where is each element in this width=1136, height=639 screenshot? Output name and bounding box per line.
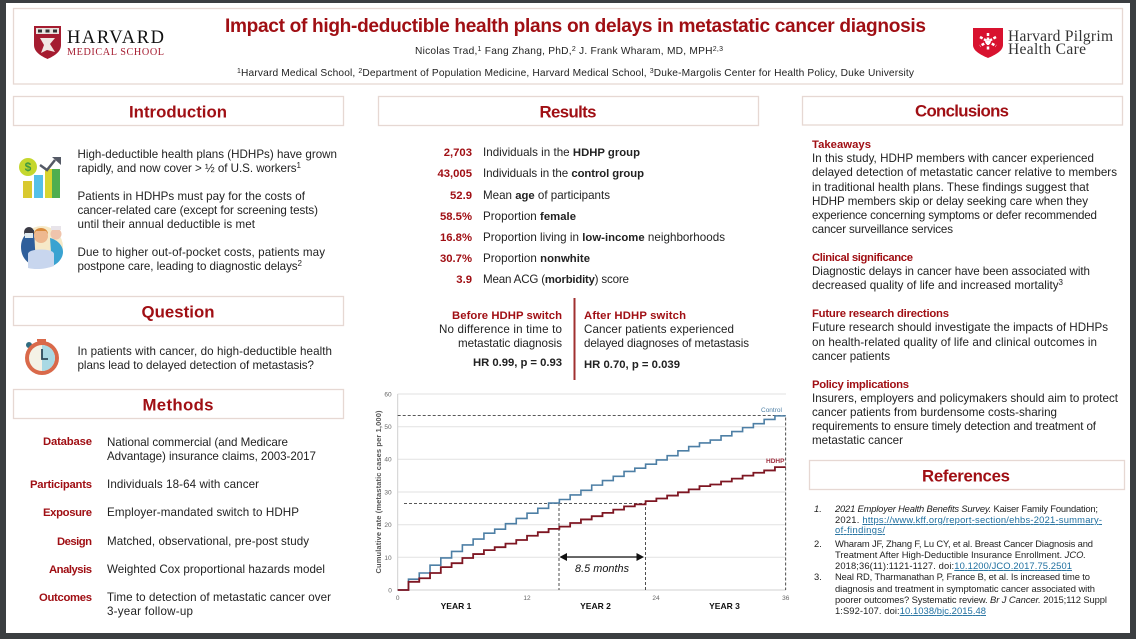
block: future research directions: on health-related quality of life and clinical outcomes in bbox=[812, 336, 1097, 349]
block: clinical significance: Diagnostic delays in cancer have been associated with bbox=[812, 265, 1090, 278]
block: takeaways: delayed detection of metastatic cancer relative to members bbox=[812, 166, 1117, 179]
block: future research directions: cancer patients bbox=[812, 350, 890, 363]
icon: health care workers bbox=[21, 226, 63, 269]
logo: Harvard Medical School: MEDICAL SCHOOL bbox=[67, 47, 164, 58]
reference 3 bbox=[814, 571, 1107, 616]
text: intro paragraph 2: Patients in HDHPs must pay for the costs of bbox=[78, 190, 306, 203]
stat: control group: Individuals in the control group bbox=[483, 167, 644, 180]
row: participants: Individuals 18-64 with cancer bbox=[107, 478, 259, 491]
reference 2: 2018;36(11):1121-1127. doi:10.1200/JCO.2017.75.2501 bbox=[835, 560, 1072, 571]
panel: results bbox=[374, 96, 790, 611]
x axis labels: 36 bbox=[782, 595, 790, 602]
reference 3: 1:S92-107. doi:10.1038/bjc.2015.48 bbox=[835, 605, 986, 616]
label: 8.5 months: 8.5 months bbox=[575, 563, 630, 575]
heading: results: Results bbox=[540, 102, 596, 122]
panel: question bbox=[14, 296, 344, 375]
chart: cumulative rate of metastatic cases bbox=[374, 392, 790, 611]
row: database bbox=[43, 436, 316, 463]
stat: age: Mean age of participants bbox=[483, 189, 610, 202]
authors: 2,3 bbox=[713, 46, 723, 53]
text: intro paragraph 2: cancer-related care (except for screening tests) bbox=[78, 204, 318, 217]
text: intro paragraph 1: High-deductible health plans (HDHPs) have grown bbox=[78, 148, 337, 161]
block: takeaways bbox=[812, 139, 1117, 236]
text: intro paragraph 3: Due to higher out-of-pocket costs, patients may bbox=[78, 246, 325, 259]
logo: Harvard Pilgrim Health Care: Harvard Pilgrim bbox=[1008, 28, 1113, 45]
row: exposure: Employer-mandated switch to HDHP bbox=[107, 506, 299, 519]
row: database: Database bbox=[43, 436, 92, 448]
affiliations: 2 bbox=[358, 68, 362, 75]
heading: introduction: Introduction bbox=[129, 102, 227, 122]
authors: 2 bbox=[572, 46, 576, 53]
affiliations: Department of Population Medicine, Harvard Medical School, bbox=[362, 68, 650, 79]
authors: 1 bbox=[478, 46, 482, 53]
stat: morbidity: 3.9 bbox=[456, 274, 472, 286]
row: analysis: Weighted Cox proportional hazards model bbox=[107, 563, 325, 576]
reference 2: Wharam JF, Zhang F, Lu CY, et al. Breast Cancer Diagnosis and bbox=[835, 538, 1093, 549]
y axis labels: 40 bbox=[384, 456, 392, 464]
reference 3: diagnosis and treatment in symptomatic cancer associated with bbox=[835, 583, 1095, 594]
row: database: National commercial (and Medicare bbox=[107, 436, 288, 449]
panel: references bbox=[810, 460, 1124, 616]
logo: Harvard Pilgrim Health Care: Health Care bbox=[1008, 41, 1086, 58]
row: exposure: Exposure bbox=[43, 507, 92, 519]
text: intro paragraph 3: postpone care, leading to diagnostic delays bbox=[78, 260, 298, 273]
row: database: Advantage) insurance claims, 2003-2017 bbox=[107, 450, 316, 463]
block: takeaways: experience concerning symptoms or defer recommended bbox=[812, 209, 1097, 222]
reference 2: 2. bbox=[814, 538, 822, 549]
reference 3: 3. bbox=[814, 571, 822, 582]
callout: before HDHP switch bbox=[439, 310, 562, 369]
line: HDHP bbox=[398, 467, 786, 590]
heading: conclusions: Conclusions bbox=[915, 102, 1009, 120]
row: participants bbox=[30, 478, 259, 491]
text: intro paragraph 3: 2 bbox=[298, 259, 303, 268]
block: policy implications: cancer patients from burdensome costs-sharing bbox=[812, 406, 1057, 419]
block: takeaways: HDHP members skip or delay seeking care when they bbox=[812, 195, 1088, 208]
stat: female bbox=[440, 210, 576, 223]
stat: morbidity: Mean ACG (morbidity) score bbox=[483, 273, 629, 286]
reference dashed lines bbox=[398, 416, 786, 590]
callout: after HDHP switch bbox=[584, 310, 749, 371]
stat: low income: 16.8% bbox=[440, 232, 472, 244]
x axis labels bbox=[396, 595, 790, 611]
reference 1: 1. bbox=[814, 503, 822, 514]
affiliations: Harvard Medical School, bbox=[241, 68, 358, 79]
stat: HDHP group: 2,703 bbox=[444, 147, 472, 159]
y axis labels bbox=[384, 392, 392, 594]
stat: female: 58.5% bbox=[440, 211, 472, 223]
block: policy implications: metastatic cancer bbox=[812, 434, 903, 447]
label: control: Control bbox=[761, 407, 783, 414]
block: future research directions bbox=[812, 308, 1108, 363]
block: clinical significance bbox=[812, 252, 1090, 292]
reference 2 bbox=[814, 538, 1093, 571]
row: design: Matched, observational, pre-post study bbox=[107, 535, 309, 548]
icon: money and growth chart bbox=[19, 157, 61, 198]
callout: after HDHP switch: Cancer patients experienced bbox=[584, 323, 734, 336]
heading: question: Question bbox=[142, 302, 214, 322]
stat: control group: 43,005 bbox=[437, 168, 472, 180]
logo: Harvard Medical School bbox=[34, 26, 164, 59]
icon: money and growth chart: $ bbox=[25, 160, 32, 174]
block: clinical significance: Clinical significance bbox=[812, 252, 913, 264]
x axis labels: YEAR 3 bbox=[709, 601, 740, 611]
text: intro paragraph 2 bbox=[78, 190, 318, 231]
row: participants: Participants bbox=[30, 479, 92, 491]
affiliations: 1 bbox=[237, 68, 241, 75]
title: Impact of high-deductible health plans on delays in metastatic cancer diagnosis bbox=[225, 16, 926, 37]
heading: conclusions bbox=[802, 96, 1122, 125]
callout: after HDHP switch: After HDHP switch bbox=[584, 310, 686, 322]
authors: Nicolas Trad, bbox=[415, 46, 477, 57]
heading: results bbox=[378, 96, 758, 126]
block: takeaways: cancer surveillance services bbox=[812, 223, 953, 236]
block: future research directions: Future research should investigate the impacts of HDHPs bbox=[812, 321, 1108, 334]
block: takeaways: Takeaways bbox=[812, 139, 871, 151]
text: intro paragraph 1: rapidly, and now cover > ½ of U.S. workers bbox=[78, 162, 297, 175]
stat: low income: Proportion living in low-income neighborhoods bbox=[483, 231, 725, 244]
stat: nonwhite: 30.7% bbox=[440, 253, 472, 265]
label: HDHP: HDHP bbox=[766, 458, 785, 465]
affiliations: Duke-Margolis Center for Health Policy, Duke University bbox=[654, 68, 915, 79]
text: research question: plans lead to delayed detection of metastasis? bbox=[78, 359, 315, 372]
text: intro paragraph 1 bbox=[78, 148, 337, 175]
block: policy implications: Policy implications bbox=[812, 379, 909, 391]
row: analysis: Analysis bbox=[49, 564, 92, 576]
heading: introduction bbox=[14, 96, 344, 126]
reference 1: of-findings/ bbox=[835, 524, 885, 535]
affiliations: 3 bbox=[650, 68, 654, 75]
panel: introduction bbox=[14, 96, 344, 273]
y axis labels: 60 bbox=[384, 392, 392, 398]
reference 3: poorer outcomes? Systematic review. Br J Cancer. 2015;112 Suppl bbox=[835, 594, 1107, 605]
block: policy implications bbox=[812, 379, 1119, 447]
logo: Harvard Medical School: HARVARD bbox=[67, 28, 164, 48]
text: intro paragraph 3 bbox=[78, 246, 325, 273]
x axis labels: 24 bbox=[652, 595, 660, 602]
y axis labels: 0 bbox=[388, 588, 392, 594]
panel: conclusions bbox=[802, 96, 1122, 447]
row: outcomes bbox=[39, 591, 331, 618]
callout: after HDHP switch: delayed diagnoses of metastasis bbox=[584, 337, 749, 350]
reference 1: 2021. https://www.kff.org/report-section/ehbs-2021-summary- bbox=[835, 514, 1102, 525]
block: future research directions: Future research directions bbox=[812, 308, 949, 320]
logo: Harvard Pilgrim Health Care bbox=[973, 28, 1113, 58]
authors: J. Frank Wharam, MD, MPH bbox=[576, 46, 713, 57]
block: takeaways: In this study, HDHP members with cancer experienced bbox=[812, 152, 1094, 165]
heading: references bbox=[810, 460, 1124, 490]
text: research question: In patients with cancer, do high-deductible health bbox=[78, 345, 332, 358]
callout: after HDHP switch: HR 0.70, p = 0.039 bbox=[584, 359, 680, 371]
callout: before HDHP switch: Before HDHP switch bbox=[452, 310, 562, 322]
callout: before HDHP switch: metastatic diagnosis bbox=[458, 337, 562, 350]
block: takeaways: in traditional health plans. These findings suggest that bbox=[812, 181, 1090, 194]
line: control bbox=[398, 416, 786, 590]
authors: Fang Zhang, PhD, bbox=[482, 46, 572, 57]
header panel bbox=[14, 8, 1122, 84]
stat: HDHP group: Individuals in the HDHP group bbox=[483, 146, 640, 159]
row: outcomes: 3-year follow-up bbox=[107, 605, 193, 618]
text: intro paragraph 1: 1 bbox=[297, 161, 302, 170]
y axis labels: 20 bbox=[384, 522, 392, 529]
text: research question bbox=[78, 345, 332, 372]
x axis labels: 0 bbox=[396, 595, 400, 602]
callout: before HDHP switch: No difference in time to bbox=[439, 323, 562, 336]
heading: references: References bbox=[922, 466, 1010, 486]
y axis labels: 10 bbox=[384, 555, 392, 562]
stat: female: Proportion female bbox=[483, 210, 576, 223]
row: outcomes: Time to detection of metastatic cancer over bbox=[107, 591, 331, 604]
stat: age: 52.9 bbox=[450, 190, 472, 202]
heading: methods: Methods bbox=[142, 396, 214, 414]
heading: question bbox=[14, 296, 344, 326]
x axis labels: YEAR 1 bbox=[441, 601, 472, 611]
row: design: Design bbox=[57, 536, 92, 548]
row: outcomes: Outcomes bbox=[39, 592, 92, 604]
x axis labels: 12 bbox=[523, 595, 531, 602]
block: policy implications: requirements to ensure timely detection and treatment of bbox=[812, 420, 1097, 433]
y axis labels: 30 bbox=[384, 490, 392, 496]
reference 1 bbox=[814, 503, 1102, 535]
text: intro paragraph 2: until their annual deductible is met bbox=[78, 218, 256, 231]
heading: methods bbox=[14, 390, 344, 418]
icon: stopwatch bbox=[25, 339, 59, 375]
reference 1: 2021 Employer Health Benefits Survey. Kaiser Family Foundation; bbox=[834, 503, 1098, 514]
panel: methods bbox=[14, 390, 344, 618]
reference 3: Neal RD, Tharmanathan P, France B, et al. Is increased time to bbox=[835, 571, 1090, 582]
stat: nonwhite: Proportion nonwhite bbox=[483, 252, 590, 265]
block: clinical significance: 3 bbox=[1059, 278, 1064, 287]
callout: before HDHP switch: HR 0.99, p = 0.93 bbox=[473, 357, 562, 369]
reference 2: Treatment After High-Deductible Insurance Enrollment. JCO. bbox=[835, 549, 1086, 560]
y axis title: Cumulative rate (metastatic cases per 1,000) bbox=[374, 410, 383, 574]
block: policy implications: Insurers, employers and policymakers should aim to protect bbox=[812, 392, 1119, 405]
x axis labels: YEAR 2 bbox=[580, 601, 611, 611]
arrow: 8.5 month gap bbox=[560, 553, 644, 561]
block: clinical significance: decreased quality of life and increased mortality bbox=[812, 279, 1059, 292]
y axis labels: 50 bbox=[384, 424, 392, 431]
